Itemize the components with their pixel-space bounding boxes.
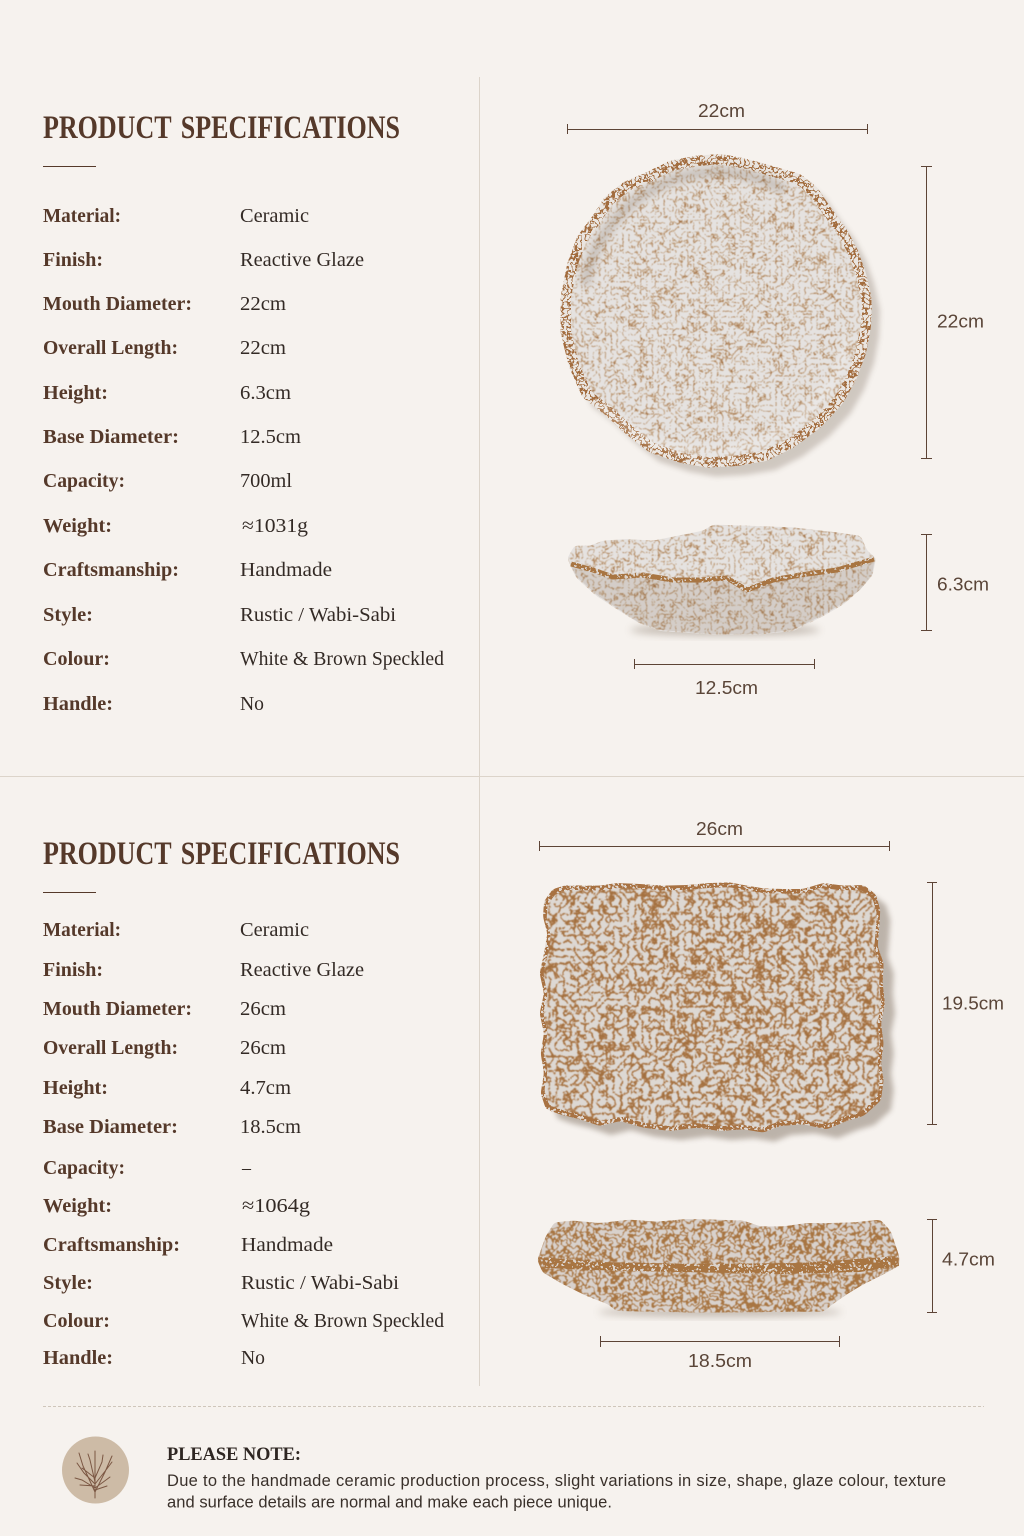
spec row: finish: Reactive Glaze	[240, 959, 364, 981]
spec row: craftsmanship	[43, 559, 332, 581]
dimension: plate length 19.5cm	[927, 882, 1004, 1124]
dimension: bowl height 6.3cm: 6.3cm	[937, 574, 989, 594]
spec row: weight: Weight:	[43, 1195, 112, 1217]
dimension: bowl length 22cm: 22cm	[937, 310, 984, 332]
note text line 2: and surface details are normal and make each piece unique.	[167, 1494, 612, 1512]
dimension: bowl width 22cm: 22cm	[698, 100, 745, 121]
spec row: overall length: Overall Length:	[43, 1037, 178, 1059]
spec row: handle: No	[240, 693, 264, 715]
spec row: capacity: –	[241, 1157, 252, 1179]
spec row: craftsmanship: Craftsmanship:	[43, 559, 179, 581]
spec row: base diameter: Base Diameter:	[43, 1116, 178, 1138]
spec row: style: Rustic / Wabi-Sabi	[240, 604, 396, 626]
spec row: style	[43, 1272, 399, 1294]
spec row: base diameter	[43, 426, 301, 448]
spec row: base diameter: 18.5cm	[240, 1116, 301, 1138]
spec row: capacity: 700ml	[240, 470, 292, 492]
spec row: overall length: Overall Length:	[43, 337, 178, 359]
spec row: finish	[43, 959, 364, 981]
spec row: finish	[43, 249, 364, 271]
dimension: bowl width 22cm	[568, 100, 868, 134]
spec row: mouth diameter: Mouth Diameter:	[43, 293, 192, 315]
spec row: weight	[43, 1195, 310, 1217]
dimension: plate width 26cm	[540, 818, 890, 851]
spec row: craftsmanship	[43, 1234, 333, 1256]
spec row: mouth diameter	[43, 998, 286, 1020]
spec row: capacity: Capacity:	[43, 470, 125, 492]
spec row: material: Material:	[43, 919, 121, 941]
dimension: plate height 4.7cm	[927, 1220, 995, 1312]
spec row: mouth diameter: 22cm	[240, 293, 286, 315]
spec row: material	[43, 919, 309, 941]
dimension: bowl base 12.5cm	[634, 659, 815, 698]
spec row: mouth diameter: Mouth Diameter:	[43, 998, 192, 1020]
spec row: mouth diameter	[43, 293, 286, 315]
note text line 1: Due to the handmade ceramic production process, slight variations in size, shape, glaze colour, texture	[167, 1472, 946, 1490]
spec row: craftsmanship: Handmade	[241, 1234, 333, 1256]
spec row: material	[43, 205, 309, 227]
spec row: style: Style:	[43, 604, 93, 626]
illustration: round bowl side view	[568, 526, 875, 636]
spec row: material: Material:	[43, 205, 121, 227]
spec row: height: Height:	[43, 382, 108, 404]
spec row: height: 4.7cm	[240, 1077, 291, 1099]
icon: tree badge	[62, 1436, 129, 1504]
spec row: height: 6.3cm	[240, 382, 291, 404]
spec row: handle	[43, 693, 264, 715]
spec row: height	[43, 382, 291, 404]
spec row: colour: White & Brown Speckled	[240, 648, 444, 670]
dimension: plate length 19.5cm: 19.5cm	[942, 992, 1004, 1014]
spec row: style: Style:	[43, 1272, 93, 1294]
spec row: capacity	[43, 1157, 252, 1179]
spec row: finish: Finish:	[43, 249, 103, 271]
spec row: weight	[43, 515, 308, 537]
spec row: height: Height:	[43, 1077, 108, 1099]
dimension: plate width 26cm: 26cm	[696, 818, 743, 839]
spec row: material: Ceramic	[240, 919, 309, 941]
dimension: bowl height 6.3cm	[921, 534, 989, 631]
spec row: material: Ceramic	[240, 205, 309, 227]
spec row: style	[43, 604, 396, 626]
spec row: colour: White & Brown Speckled	[241, 1310, 444, 1332]
spec row: handle	[43, 1347, 265, 1369]
spec row: overall length	[43, 1037, 286, 1059]
spec row: base diameter	[43, 1116, 301, 1138]
dimension: bowl length 22cm	[921, 166, 984, 458]
spec row: finish: Finish:	[43, 959, 103, 981]
heading: PRODUCT SPECIFICATIONS	[43, 836, 400, 872]
dimension: bowl base 12.5cm: 12.5cm	[695, 677, 758, 698]
note heading: PLEASE NOTE:	[167, 1444, 301, 1465]
spec row: finish: Reactive Glaze	[240, 249, 364, 271]
illustration: rectangular plate side view	[538, 1220, 899, 1317]
illustration: round bowl top view	[562, 155, 880, 477]
dimension: plate base 18.5cm: 18.5cm	[688, 1350, 752, 1371]
spec row: handle: Handle:	[43, 1347, 113, 1369]
spec row: weight: Weight:	[43, 515, 112, 537]
dimension: plate base 18.5cm	[600, 1336, 840, 1371]
note block	[167, 1444, 946, 1512]
spec row: overall length: 26cm	[240, 1037, 286, 1059]
spec row: weight: ≈1031g	[242, 515, 308, 537]
spec row: handle: No	[241, 1347, 265, 1369]
illustration: rectangular plate top view	[541, 883, 895, 1142]
spec row: craftsmanship: Handmade	[240, 559, 332, 581]
spec row: height	[43, 1077, 291, 1099]
spec row: style: Rustic / Wabi-Sabi	[241, 1272, 399, 1294]
spec row: base diameter: Base Diameter:	[43, 426, 179, 448]
spec row: overall length	[43, 337, 286, 359]
spec row: base diameter: 12.5cm	[240, 426, 301, 448]
spec row: capacity: Capacity:	[43, 1157, 125, 1179]
spec row: colour: Colour:	[43, 1310, 110, 1332]
heading: PRODUCT SPECIFICATIONS	[43, 110, 400, 146]
spec row: colour	[43, 648, 444, 670]
panel: specifications, rectangular plate	[43, 836, 444, 1369]
spec row: handle: Handle:	[43, 693, 113, 715]
panel: specifications, round bowl	[43, 110, 444, 715]
spec row: colour	[43, 1310, 444, 1332]
spec row: colour: Colour:	[43, 648, 110, 670]
spec row: capacity	[43, 470, 292, 492]
spec row: craftsmanship: Craftsmanship:	[43, 1234, 180, 1256]
spec row: mouth diameter: 26cm	[240, 998, 286, 1020]
spec row: weight: ≈1064g	[242, 1195, 310, 1217]
spec row: overall length: 22cm	[240, 337, 286, 359]
dimension: plate height 4.7cm: 4.7cm	[942, 1248, 995, 1270]
